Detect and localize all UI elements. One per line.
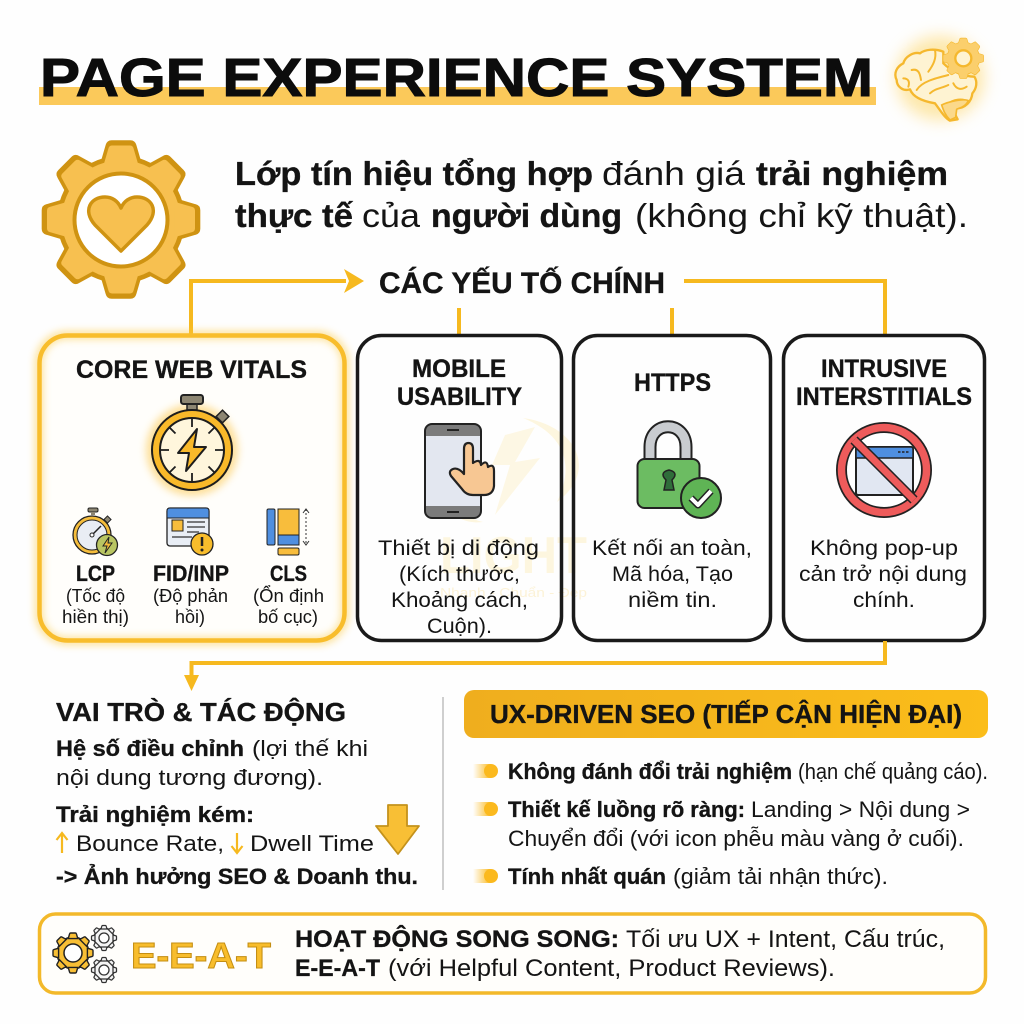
label: LCP: hiền thị): [62, 607, 129, 627]
text: mobile usability description: [378, 536, 539, 638]
label: FID/INP: [153, 561, 229, 627]
text: https description: [592, 536, 752, 612]
watermark: LIGHT: [440, 527, 587, 585]
label: CLS: [253, 561, 324, 627]
text: parallel activity: [295, 925, 945, 982]
icon: phone with tapping hand: [425, 424, 494, 518]
heading: mobile usability: [397, 355, 522, 411]
label: CLS: CLS: [270, 561, 307, 586]
bullet: clear flow: Landing > Nội dung >: [751, 797, 970, 822]
icon: LCP gauge: [73, 508, 118, 556]
intro text: thực tế: [235, 197, 354, 234]
bullet: no trade-off: [473, 759, 988, 784]
text: parallel activity: HOẠT ĐỘNG SONG SONG:: [295, 925, 619, 953]
label: LCP: LCP: [76, 561, 115, 586]
icon: FID browser with warning: [167, 508, 213, 555]
heading: https: HTTPS: [634, 369, 711, 397]
icon: gears: [53, 926, 116, 982]
watermark: [440, 418, 587, 600]
intro text: [235, 155, 968, 234]
label: FID/INP: FID/INP: [153, 561, 229, 586]
panel: e-e-a-t: [40, 914, 986, 993]
bullet: clear flow: Chuyển đổi (với icon phễu màu vàng ở cuối).: [508, 826, 964, 851]
text: parallel activity: Tối ưu UX + Intent, Cấu trúc,: [626, 926, 945, 953]
heading: intrusive interstitials: INTERSTITIALS: [796, 383, 972, 411]
text: mobile usability description: Cuộn).: [427, 614, 492, 638]
bullet: consistency: [473, 864, 888, 889]
text: parallel activity: (với Helpful Content, Product Reviews).: [388, 955, 835, 982]
panel: core web vitals: [39, 335, 345, 641]
text: poor experience: [56, 802, 418, 889]
intro text: của: [362, 197, 421, 234]
bullet: consistency: Tính nhất quán: [508, 864, 666, 889]
text: intrusive description: chính.: [853, 588, 915, 612]
heading: mobile usability: USABILITY: [397, 383, 522, 411]
heading: role and impact: VAI TRÒ & TÁC ĐỘNG: [56, 697, 346, 727]
heading: main factors: CÁC YẾU TỐ CHÍNH: [379, 266, 665, 300]
label: e-e-a-t: E-E-A-T: [131, 935, 271, 976]
intro text: người dùng: [431, 197, 622, 234]
intro text: (không chỉ kỹ thuật).: [635, 197, 968, 234]
text: https description: niềm tin.: [628, 588, 717, 612]
text: https description: Kết nối an toàn,: [592, 536, 752, 560]
icon: no pop-up sign: [842, 428, 926, 512]
bullet: consistency: (giảm tải nhận thức).: [673, 864, 888, 889]
heading: intrusive interstitials: [796, 355, 972, 411]
bullet: clear flow: Thiết kế luồng rõ ràng:: [508, 797, 745, 822]
text: poor experience: -> Ảnh hưởng SEO & Doanh thu.: [56, 864, 418, 889]
panel: mobile usability: [358, 336, 562, 640]
label: CLS: (Ổn định: [253, 585, 324, 606]
text: adjustment factor: [56, 736, 368, 790]
intro text: trải nghiệm: [756, 155, 948, 192]
panel: ux-driven seo: [464, 690, 988, 889]
label: CLS: bố cục): [258, 607, 318, 627]
arrow: connectors to main factors: [191, 269, 885, 335]
text: parallel activity: E-E-A-T: [295, 955, 380, 982]
heading: core web vitals: CORE WEB VITALS: [76, 356, 307, 384]
text: poor experience: Dwell Time: [250, 831, 374, 856]
watermark: Nhanh - Chuẩn - Đẹp: [440, 585, 587, 600]
heading bar: ux-driven seo: [464, 690, 988, 738]
panel: role and impact: [56, 697, 419, 889]
bullet: no trade-off: Không đánh đổi trải nghiệm: [508, 759, 792, 784]
arrow: connector to role section: [184, 641, 885, 691]
bullet: no trade-off: (hạn chế quảng cáo).: [798, 759, 988, 784]
intro text: đánh giá: [602, 155, 746, 192]
text: mobile usability description: Thiết bị di động: [378, 536, 539, 560]
text: intrusive description: [799, 536, 967, 612]
icon: brain with gear: [895, 36, 984, 121]
text: poor experience: Bounce Rate,: [76, 831, 224, 856]
heading bar: ux-driven seo: UX-DRIVEN SEO (TIẾP CẬN HIỆN ĐẠI): [490, 699, 962, 729]
panel: https: [574, 336, 770, 640]
icon: gear with heart: [44, 142, 198, 296]
heading: intrusive interstitials: INTRUSIVE: [821, 355, 947, 383]
label: LCP: [62, 561, 129, 627]
panel: intrusive interstitials: [784, 336, 984, 640]
intro text: Lớp tín hiệu tổng hợp: [235, 155, 593, 192]
text: mobile usability description: Khoảng cách,: [391, 588, 528, 612]
title: PAGE EXPERIENCE SYSTEM: [40, 48, 873, 108]
text: https description: Mã hóa, Tạo: [612, 562, 733, 586]
bullet: clear flow: [473, 797, 970, 851]
text: intrusive description: cản trở nội dung: [799, 562, 967, 586]
heading: mobile usability: MOBILE: [412, 355, 506, 383]
label: FID/INP: (Độ phản: [153, 586, 228, 606]
text: poor experience: Trải nghiệm kém:: [56, 802, 254, 827]
label: FID/INP: hồi): [175, 607, 205, 627]
text: adjustment factor: Hệ số điều chỉnh: [56, 736, 244, 761]
icon: CLS layout shift: [267, 509, 309, 555]
text: adjustment factor: (lợi thế khi: [252, 736, 368, 761]
icon: green padlock with check: [638, 427, 721, 518]
text: mobile usability description: (Kích thước,: [399, 562, 520, 586]
label: LCP: (Tốc độ: [66, 586, 125, 606]
text: intrusive description: Không pop-up: [810, 536, 958, 560]
icon: stopwatch: [146, 395, 238, 496]
text: adjustment factor: nội dung tương đương).: [56, 765, 323, 790]
icon: big down arrow: [376, 805, 419, 854]
